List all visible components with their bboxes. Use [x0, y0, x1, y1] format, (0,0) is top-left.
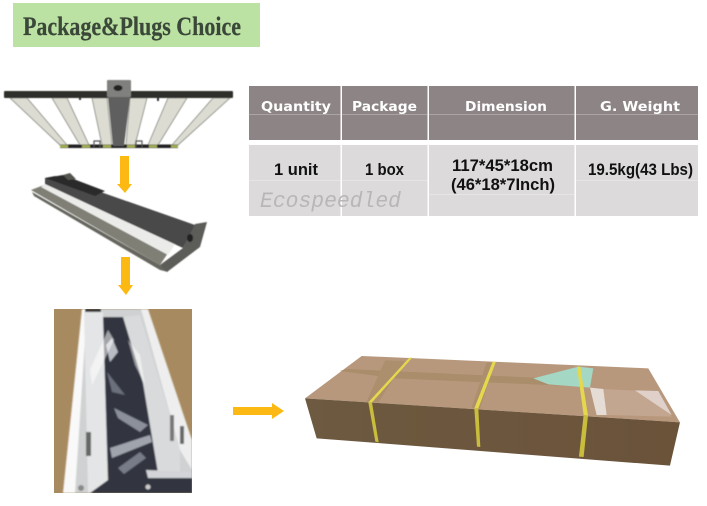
- photo: fixture packed in foam and plastic: [54, 309, 192, 493]
- table data row: [249, 145, 698, 216]
- highlights: [533, 367, 593, 388]
- plastic wrap base: [63, 309, 192, 493]
- table data row: 19.5kg(43 Lbs): [588, 161, 693, 179]
- foam left: [63, 309, 87, 493]
- arrow: packed fixture to carton: [233, 403, 284, 419]
- table header row: Package: [352, 99, 417, 115]
- photo: wrapped carton with yellow straps: [305, 356, 680, 466]
- packing tape: [340, 369, 585, 387]
- watermark: Ecospeedled: [260, 189, 402, 214]
- product image: unfolded LED fixture: [4, 80, 233, 148]
- light strip right: [123, 315, 180, 473]
- table data row: 1 unit: [274, 161, 319, 179]
- table header row: Dimension: [465, 99, 547, 115]
- title banner: [13, 3, 260, 47]
- table header row: [249, 86, 698, 140]
- foam right: [141, 309, 192, 470]
- hardware: [86, 432, 91, 456]
- yellow straps: [368, 358, 412, 402]
- specification table: [249, 86, 698, 216]
- table data row: 117*45*18cm: [452, 157, 553, 175]
- light strip left: [84, 312, 108, 493]
- arrow: folded fixture to packed fixture: [118, 257, 133, 295]
- product image: folded LED fixture: [31, 173, 207, 272]
- plastic highlights: [106, 338, 118, 362]
- dark body: [90, 317, 192, 493]
- table data row: (46*18*7Inch): [451, 176, 555, 194]
- table header row: Quantity: [261, 99, 331, 115]
- arrow: fixture to folded fixture: [117, 156, 132, 193]
- title text: Package&Plugs Choice: [23, 11, 241, 41]
- table header row: G. Weight: [600, 99, 681, 115]
- table data row: 1 box: [365, 161, 405, 179]
